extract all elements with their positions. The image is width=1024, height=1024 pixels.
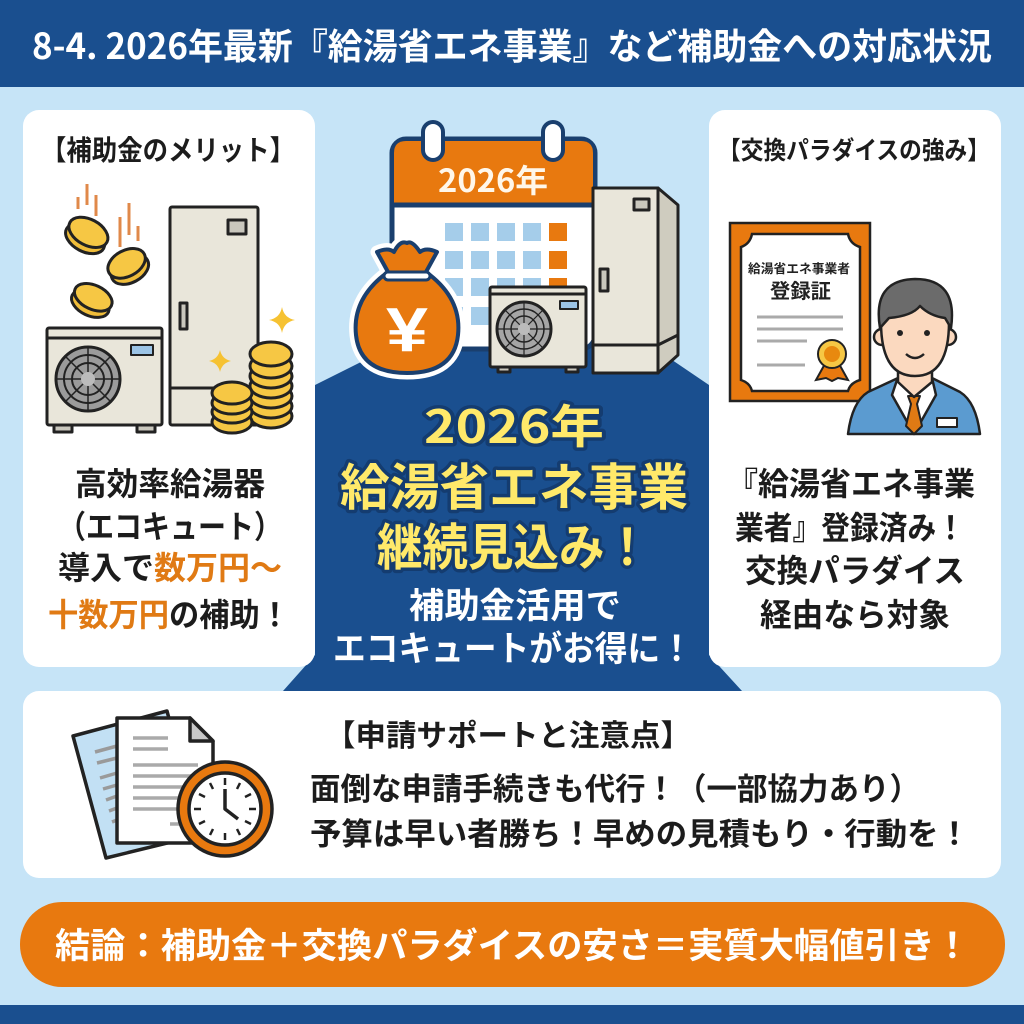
illustration: calendar: [392, 122, 595, 349]
text: application support body: 面倒な申請手続きも代行！（一部協力あり）: [310, 772, 920, 807]
text: strengths body: 『給湯省エネ事業: [727, 466, 975, 502]
text: strengths body: 業者』登録済み！: [735, 510, 965, 546]
center blue panel: [283, 345, 742, 691]
footer band: [0, 1005, 1024, 1024]
text: merits body: [48, 466, 290, 633]
conclusion banner: [20, 902, 1005, 987]
falling coins: [60, 184, 154, 323]
staff person: [848, 279, 980, 434]
title banner: [0, 0, 1024, 87]
text: merits body: （エコキュート）: [58, 509, 282, 545]
text: strengths body: 交換パラダイス: [745, 553, 965, 589]
text: center subline: 補助金活用で: [409, 587, 621, 626]
text: center subline: [333, 587, 693, 669]
text: merits body: 導入で数万円〜: [58, 550, 282, 586]
text: center headline: [333, 391, 693, 669]
certificate: 給湯省エネ事業者: [748, 261, 850, 276]
text: strengths body: 経由なら対象: [760, 597, 950, 633]
coin stacks: [212, 342, 292, 433]
panel: application support: [23, 691, 1001, 878]
sparkles: [209, 307, 295, 372]
illustration: heat pump unit: [490, 287, 586, 372]
panel: strengths: [709, 110, 1001, 667]
text: center headline: 継続見込み！: [377, 520, 650, 576]
illustration: calendar: 2026年: [438, 156, 548, 202]
text: application support body: 予算は早い者勝ち！早めの見積もり・行動を！: [310, 817, 970, 852]
panel: merits: [23, 110, 315, 667]
heading: strengths: 【交換パラダイスの強み】: [718, 136, 990, 165]
text: merits body: 十数万円の補助！: [48, 597, 290, 633]
heading: merits: 【補助金のメリット】: [41, 135, 295, 166]
certificate: 登録証: [770, 280, 831, 303]
water heater tank: [170, 207, 258, 425]
conclusion banner: 結論：補助金＋交換パラダイスの安さ＝実質大幅値引き！: [55, 926, 970, 966]
illustration: heat pump, tank and coins: [47, 184, 295, 433]
heat pump unit: [47, 328, 162, 432]
illustration: water heater tank: [593, 188, 678, 373]
text: center headline: 給湯省エネ事業: [340, 460, 688, 516]
illustration: yen money bag: [356, 242, 458, 373]
certificate: [730, 223, 870, 401]
title banner: 8-4. 2026年最新『給湯省エネ事業』など補助金への対応状況: [32, 18, 992, 70]
text: center headline: 2026年: [424, 391, 604, 457]
text: strengths body: [727, 466, 975, 633]
text: center subline: エコキュートがお得に！: [333, 630, 693, 669]
illustration: yen money bag: ¥: [386, 296, 429, 365]
icon: documents and clock: [73, 711, 272, 858]
text: merits body: 高効率給湯器: [75, 466, 265, 502]
heading: application support: 【申請サポートと注意点】: [325, 720, 691, 753]
text: application support body: [310, 772, 970, 852]
